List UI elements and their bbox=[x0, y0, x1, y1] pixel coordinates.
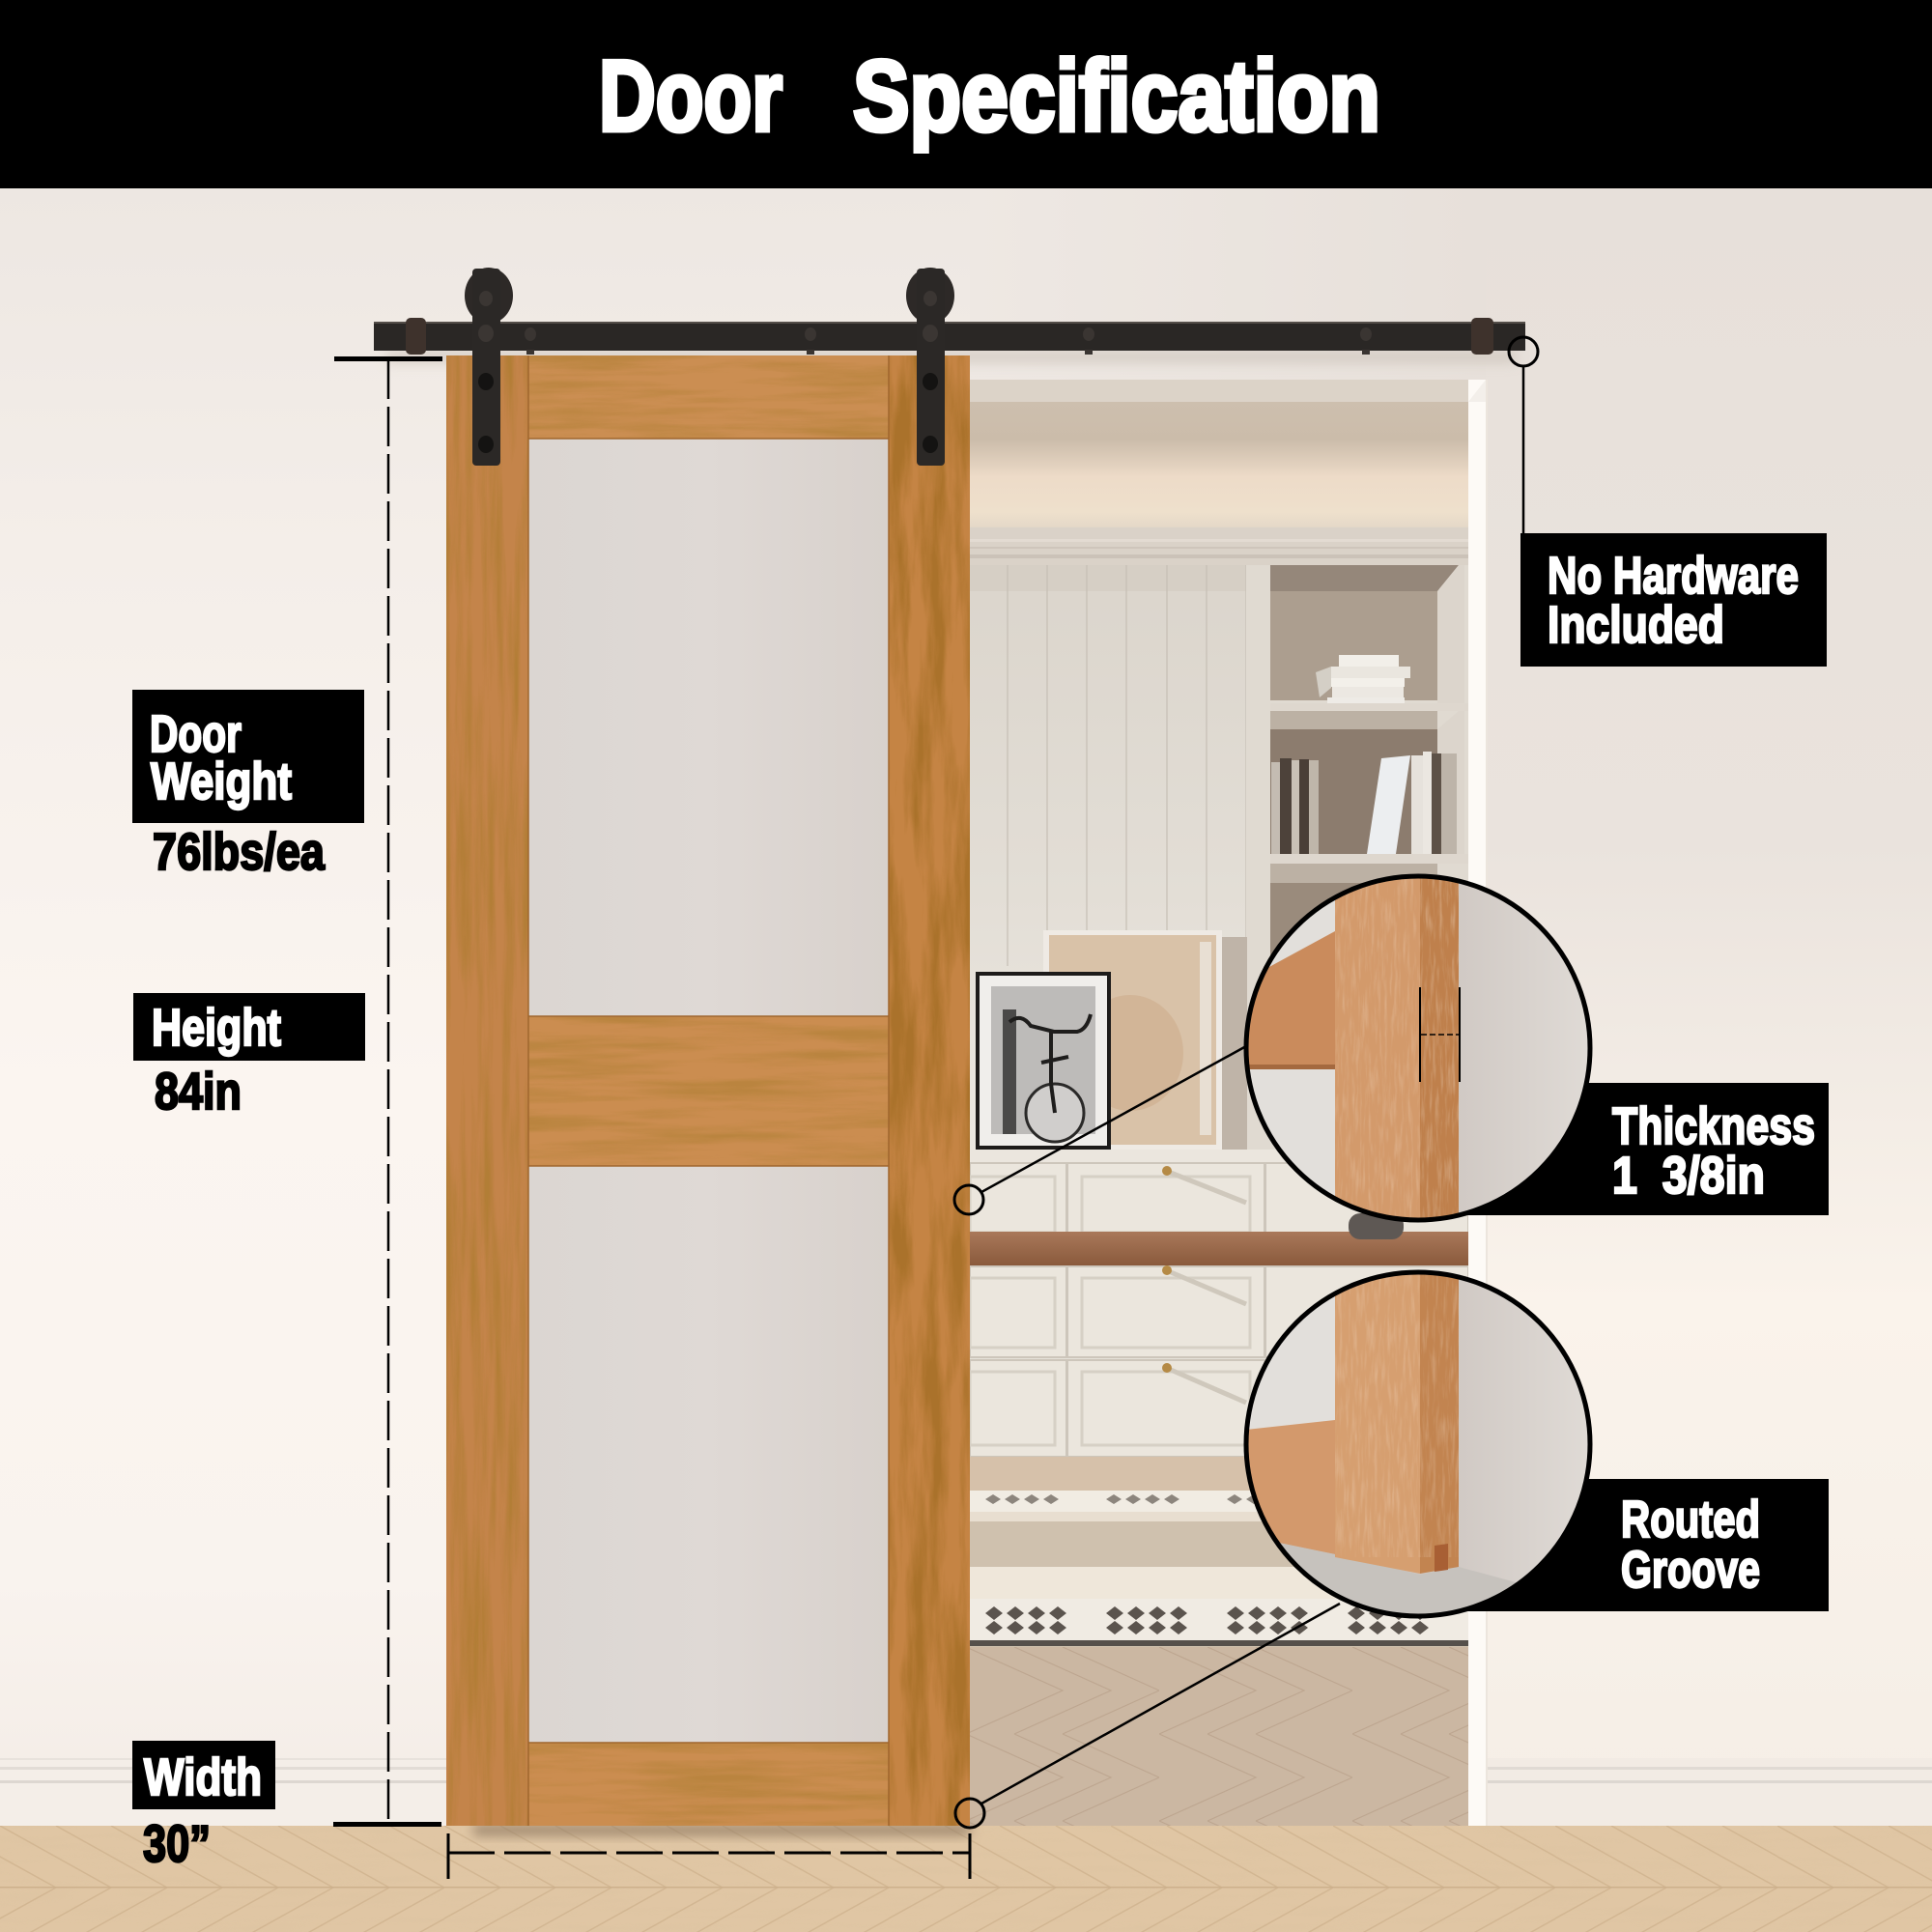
top rail bbox=[528, 355, 889, 439]
label: door weight: 76lbs/ea bbox=[153, 823, 326, 881]
label: door weight bbox=[132, 690, 364, 881]
label: height: 84in bbox=[155, 1063, 242, 1121]
callout: no hardware included: No Hardware bbox=[1548, 547, 1799, 605]
label: thickness: 1 3/8in bbox=[1612, 1147, 1765, 1205]
thickness dimension marks bbox=[1419, 987, 1461, 1082]
books: upright row right bbox=[1367, 752, 1457, 854]
lower glass panel bbox=[528, 1166, 889, 1743]
detail circle: routed groove bbox=[1246, 1271, 1594, 1623]
label: thickness: Thickness bbox=[1612, 1097, 1815, 1155]
label: width: 30” bbox=[143, 1815, 211, 1873]
bookcase bbox=[1246, 565, 1468, 1164]
label: thickness bbox=[1449, 1083, 1829, 1215]
title bbox=[599, 41, 1380, 153]
label: routed groove bbox=[1449, 1479, 1829, 1611]
label: routed groove: Routed bbox=[1621, 1491, 1760, 1548]
room interior through the doorway bbox=[970, 380, 1486, 1826]
room floor bbox=[970, 1647, 1468, 1826]
beige art print bbox=[1043, 930, 1247, 1150]
books: upright row left bbox=[1271, 758, 1319, 854]
width dimension line bbox=[446, 1833, 972, 1879]
right hanger bbox=[906, 268, 954, 466]
baseboard bbox=[0, 1758, 1932, 1826]
header bar bbox=[0, 0, 1932, 188]
track shadow on wall bbox=[386, 350, 1517, 363]
left hanger bbox=[465, 268, 513, 466]
floor bbox=[0, 1826, 1932, 1932]
rug bbox=[970, 1491, 1468, 1647]
leader line to groove detail bbox=[955, 1604, 1340, 1828]
label: door weight: Weight bbox=[151, 753, 292, 810]
title: Specification bbox=[853, 41, 1380, 153]
vase on counter bbox=[1349, 1213, 1404, 1239]
wall panelling bbox=[970, 565, 1260, 1164]
framed bicycle photo bbox=[976, 972, 1111, 1150]
detail circle: thickness bbox=[1246, 875, 1594, 1223]
door opening soffit bbox=[970, 380, 1486, 402]
label: width bbox=[132, 1741, 275, 1873]
door shadow on floor bbox=[473, 1826, 970, 1834]
middle rail bbox=[528, 1016, 889, 1166]
door jamb bbox=[1468, 380, 1488, 1826]
height dimension line bbox=[333, 356, 442, 1827]
callout: no hardware included bbox=[1509, 337, 1827, 667]
label: routed groove: Groove bbox=[1621, 1541, 1760, 1599]
leader line to thickness detail bbox=[954, 1046, 1246, 1214]
crown moulding bbox=[970, 527, 1468, 565]
label: width: Width bbox=[144, 1748, 262, 1806]
barn door track bbox=[374, 318, 1525, 355]
right stile bbox=[889, 355, 970, 1826]
track bolts bbox=[525, 327, 1372, 355]
callout: no hardware included: Included bbox=[1548, 596, 1724, 654]
door bbox=[446, 355, 970, 1834]
label: height: Height bbox=[152, 999, 281, 1057]
title: Door bbox=[599, 41, 782, 153]
books: stack bbox=[1316, 655, 1410, 703]
left stile bbox=[446, 355, 528, 1826]
track stoppers bbox=[406, 318, 426, 355]
label: door weight: Door bbox=[150, 705, 242, 763]
cabinet drawers bbox=[970, 1150, 1468, 1457]
wooden counter bbox=[970, 1232, 1468, 1265]
upper glass panel bbox=[528, 439, 889, 1016]
bottom rail bbox=[528, 1743, 889, 1826]
label: height bbox=[133, 993, 365, 1121]
